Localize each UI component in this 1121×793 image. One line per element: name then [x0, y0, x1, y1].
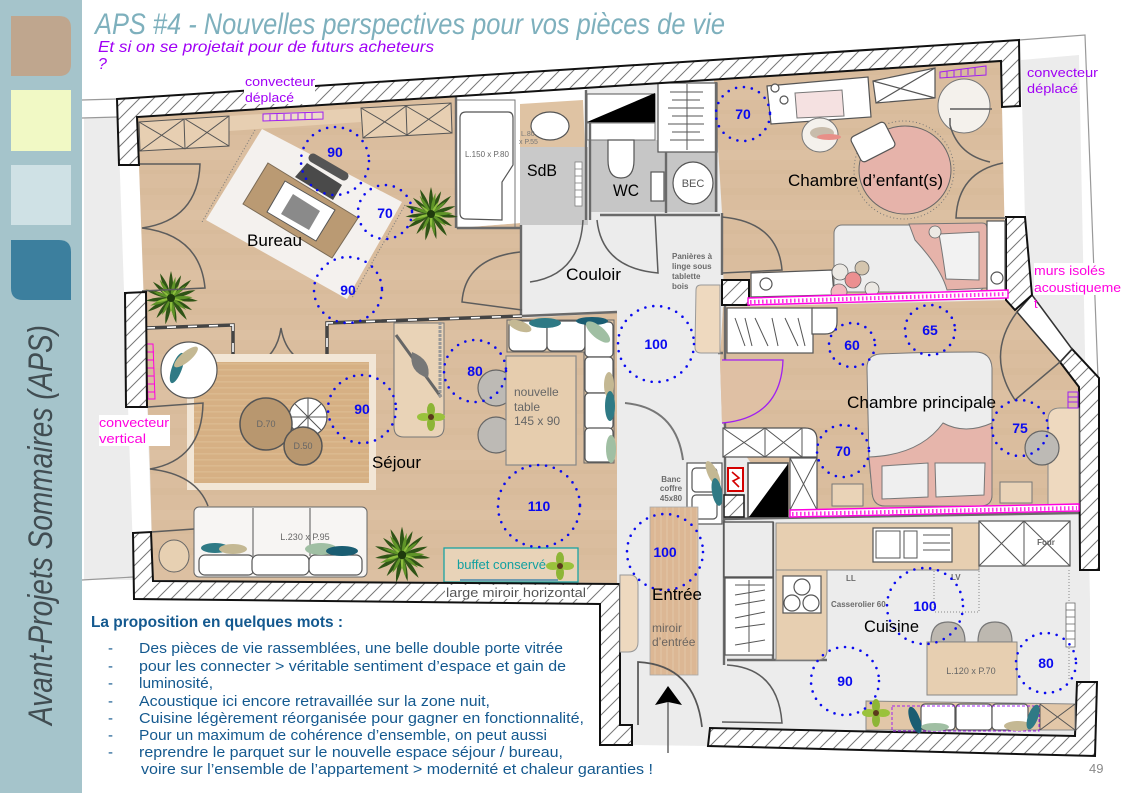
wall: south living [133, 532, 632, 745]
room labels: Couloir [566, 265, 621, 284]
clearance circles [301, 87, 1076, 715]
proposal bullets: Des pièces de vie rassemblées, une belle double porte vitrée [139, 640, 563, 657]
clearance 110: 110 [528, 498, 551, 514]
clearance 100 couloir [618, 306, 694, 382]
clearance 90 bureau top [301, 127, 369, 195]
banc label: coffre [660, 484, 683, 493]
proposal bullets: - [108, 640, 113, 657]
proposal bullets: - [108, 658, 113, 675]
panieres label: tablette [672, 272, 701, 281]
panieres label: Panières à [672, 252, 713, 261]
proposal bullets: reprendre le parquet sur le nouvelle espace séjour / bureau, [139, 744, 563, 761]
clearance 80 sejour: 80 [467, 363, 483, 379]
kid stool [802, 118, 841, 152]
proposal text block [83, 606, 653, 793]
clearance 80 cuisine [1016, 633, 1076, 693]
vanity [519, 100, 585, 147]
kid small table [850, 121, 896, 163]
closet with hangers [658, 83, 717, 152]
room labels: WC [613, 181, 639, 200]
new table: nouvelle [514, 385, 559, 399]
panieres block [695, 285, 720, 353]
bathroom white zone [456, 89, 588, 228]
exterior ground [84, 55, 1090, 700]
clearance 70 chambre enfant [716, 87, 770, 141]
room labels [247, 161, 996, 636]
wall partitions [456, 82, 1079, 665]
kid desk [767, 77, 871, 124]
clearance 90 bureau top: 90 [327, 144, 343, 160]
subtitle [98, 39, 434, 73]
proposal bullets: Cuisine légèrement réorganisée pour gagner en fonctionnalité, [139, 710, 584, 727]
note: convecteur deplace left [244, 74, 316, 105]
note: convecteur deplace right [1027, 65, 1099, 96]
table D.50 [284, 427, 322, 465]
clearance 75 [992, 400, 1048, 456]
note: convecteur vertical [99, 415, 170, 446]
room labels: Bureau [247, 231, 302, 250]
note: murs isoles: t [1034, 296, 1038, 311]
convecteur: kid [940, 66, 986, 78]
new table [506, 356, 576, 465]
note: large miroir: large miroir horizontal [446, 585, 586, 600]
sidebar [0, 0, 82, 793]
oven and hob [979, 521, 1070, 566]
entry arrow [655, 686, 682, 753]
table D.70 [240, 398, 292, 450]
kitchen labels small [831, 573, 961, 609]
proposal bullets: - [108, 675, 113, 692]
note: convecteur deplace left: déplacé [245, 90, 294, 105]
kid east door [956, 163, 1006, 218]
couloir doors [530, 215, 658, 282]
note: convecteur deplace left: convecteur [245, 74, 316, 89]
clearance 100 entree: 100 [653, 544, 677, 560]
kitchen bench [862, 699, 1075, 735]
master east door [1000, 312, 1060, 400]
WC tile [589, 140, 718, 212]
bureau west doors [140, 164, 205, 291]
SdB radiator [575, 162, 582, 206]
vanity: L.80 [521, 131, 535, 138]
master closets top [727, 308, 837, 353]
wall: top band [117, 40, 1020, 165]
convecteur vertical [146, 344, 155, 399]
sejour west doors [148, 403, 208, 532]
proposal heading: La proposition en quelques mots : [91, 614, 343, 631]
clearance 60 [829, 323, 875, 367]
note: convecteur vertical: convecteur [99, 415, 170, 430]
kid pink rug [854, 121, 954, 219]
title: APS #4 - Nouvelles perspectives pour vos pièces de vie [93, 8, 725, 41]
miroir label: miroir [652, 621, 682, 635]
entry door [638, 662, 702, 727]
swatch: light blue [11, 165, 71, 225]
bedsides [832, 482, 1032, 506]
proposal bullets: voire sur l’ensemble de l’appartement > modernité et chaleur garanties ! [141, 761, 653, 778]
bathtub [456, 100, 515, 228]
chairs round table [478, 370, 514, 453]
master bed [867, 352, 992, 506]
proposal bullets: luminosité, [139, 675, 213, 692]
clearance 100 cuisine: 100 [913, 598, 937, 614]
subtitle: ? [98, 56, 107, 73]
oven and hob: Four [1037, 538, 1055, 547]
proposal bullets: Acoustique ici encore retravaillée sur la zone nuit, [139, 693, 490, 710]
clearance 90 bureau bottom: 90 [340, 282, 356, 298]
banc label: 45x80 [660, 494, 683, 503]
proposal bullets: - [108, 693, 113, 710]
proposal bullets: pour les connecter > véritable sentiment d’espace et gain de [139, 658, 566, 675]
wood floor: bureau and sejour [137, 97, 617, 583]
room labels: Chambre principale [847, 393, 996, 412]
small hatched shaft [724, 495, 744, 517]
bathtub: L.150 x P.80 [465, 150, 509, 159]
wood floor: chambre enfant [714, 61, 1006, 305]
miroir label [652, 621, 696, 649]
wall: diagonal window [1017, 295, 1072, 362]
master seat [1025, 431, 1059, 465]
bureau closets [139, 103, 452, 151]
hall door [625, 403, 683, 460]
proposal bullets: - [108, 710, 113, 727]
buffet [444, 548, 578, 582]
black closet [748, 463, 788, 517]
side table [159, 540, 189, 572]
banc label [660, 475, 683, 503]
acoustic strip upper [748, 290, 1008, 305]
BEC boiler: BEC [682, 178, 704, 190]
banquette cushions [507, 317, 616, 463]
table D.50: D.50 [293, 441, 313, 451]
acoustic strip lower [790, 504, 1079, 517]
sejour rug [187, 354, 376, 490]
subtitle: Et si on se projetait pour de futurs acheteurs [98, 39, 434, 56]
clearance 80 cuisine: 80 [1038, 655, 1054, 671]
proposal bullets [108, 640, 653, 778]
new table: table [514, 400, 540, 414]
electric panel red [728, 468, 743, 491]
room labels: Cuisine [864, 617, 919, 636]
vanity: x P.55 [519, 139, 538, 146]
clearance 70 bureau [358, 185, 412, 239]
room labels: Chambre d’enfant(s) [788, 171, 943, 190]
plants [145, 187, 458, 583]
panieres label [672, 252, 713, 291]
note: convecteur deplace right: déplacé [1027, 81, 1078, 96]
toys [831, 226, 941, 300]
clearance 90 cuisine [811, 647, 879, 715]
kid closet [873, 68, 935, 103]
wall: east [1060, 349, 1099, 570]
note: murs isoles: acoustiqueme [1034, 280, 1121, 295]
buffet: buffet conservé [457, 558, 546, 572]
clearance 70 chambre principale: 70 [835, 443, 851, 459]
swatch: wood [11, 16, 71, 76]
kitchen table: L.120 x P.70 [946, 666, 996, 676]
desk chair [295, 158, 344, 200]
proposal bullets: Pour un maximum de cohérence d’ensemble, on peut aussi [139, 727, 547, 744]
console tv [394, 322, 445, 437]
convecteur: bureau [263, 112, 323, 121]
kitchen labels small: LV [951, 573, 961, 582]
stools [931, 622, 1012, 642]
WC sink [651, 172, 664, 201]
hob [783, 576, 821, 613]
SdB tile [520, 147, 588, 225]
note: murs isoles [1034, 263, 1121, 311]
BEC boiler [673, 162, 713, 204]
master bench [1048, 408, 1079, 505]
clearance 90 cuisine: 90 [837, 673, 853, 689]
banc coffre [687, 459, 724, 524]
clearance 70 bureau: 70 [377, 205, 393, 221]
toilet [608, 140, 634, 178]
kid armchair [938, 79, 992, 162]
table D.70: D.70 [256, 419, 276, 429]
WC black closet [587, 93, 655, 140]
convecteur: master [1068, 392, 1078, 408]
clearance 90 sejour [328, 375, 396, 443]
sink [873, 528, 952, 562]
kitchen counter top [776, 523, 979, 570]
clearance 100 cuisine [887, 568, 963, 644]
banc label: Banc [661, 475, 681, 484]
clearance 75: 75 [1012, 420, 1028, 436]
kid shelves [751, 221, 1005, 297]
room labels: Entrée [652, 585, 702, 604]
swatch: pale yellow [11, 90, 71, 151]
note: murs isoles: murs isolés [1034, 263, 1106, 278]
laptop [267, 181, 335, 241]
desk [243, 163, 358, 258]
new table: 145 x 90 [514, 414, 560, 428]
clearance 60: 60 [844, 337, 860, 353]
wall: inner block [722, 280, 749, 305]
swatch: deep blue [11, 240, 71, 300]
clearance 80 sejour [444, 340, 506, 402]
kitchen counter left [776, 570, 827, 660]
note: convecteur deplace right: convecteur [1027, 65, 1099, 80]
bureau rug [206, 129, 402, 299]
sofa [194, 507, 367, 577]
clearance 110 [498, 465, 580, 547]
child door [722, 217, 782, 273]
bureau door to corridor [462, 252, 522, 310]
page number: 49 [1089, 761, 1103, 776]
proposal bullets: - [108, 744, 113, 761]
clearance 70 chambre principale [817, 425, 869, 477]
purple door [720, 360, 783, 423]
entry console [620, 575, 638, 652]
kitchen labels small: LL [846, 574, 856, 583]
sofa: L.230 x P.95 [280, 532, 330, 542]
clearance 65 [905, 305, 955, 355]
panieres label: linge sous [672, 262, 712, 271]
wall: west stub [125, 292, 147, 407]
kitchen tall unit [724, 522, 773, 655]
clearance 70 chambre enfant: 70 [735, 106, 751, 122]
kitchen dotted outlines [934, 570, 1069, 680]
armchair [161, 342, 217, 398]
clearance 65: 65 [922, 322, 938, 338]
double door [236, 328, 327, 372]
entree wood strip [650, 507, 698, 675]
clearance 90 sejour: 90 [354, 401, 370, 417]
proposal bullets: - [108, 727, 113, 744]
clearance 100 couloir: 100 [644, 336, 668, 352]
kitchen door [722, 665, 782, 723]
miroir label: d’entrée [652, 635, 696, 649]
pouf white [289, 398, 327, 436]
vertical sidebar title: Avant-Projets Sommaires (APS) [22, 325, 60, 727]
apartment floor base [137, 61, 1080, 746]
room labels: Séjour [372, 453, 421, 472]
wood floor: chambre principale [720, 300, 1079, 517]
wall: south kitchen [708, 682, 1097, 756]
kid bed [834, 223, 987, 292]
kitchen radiator [1066, 603, 1075, 647]
note: convecteur vertical: vertical [99, 431, 146, 446]
wall: notch [1006, 217, 1032, 310]
clearance 90 bureau bottom [314, 257, 382, 323]
kitchen labels small: Casserolier 60 [831, 600, 886, 609]
panieres label: bois [672, 282, 689, 291]
kitchen table [927, 642, 1017, 695]
room labels: SdB [527, 161, 557, 180]
master closets lower [723, 428, 817, 510]
clearance 100 entree [627, 514, 703, 590]
